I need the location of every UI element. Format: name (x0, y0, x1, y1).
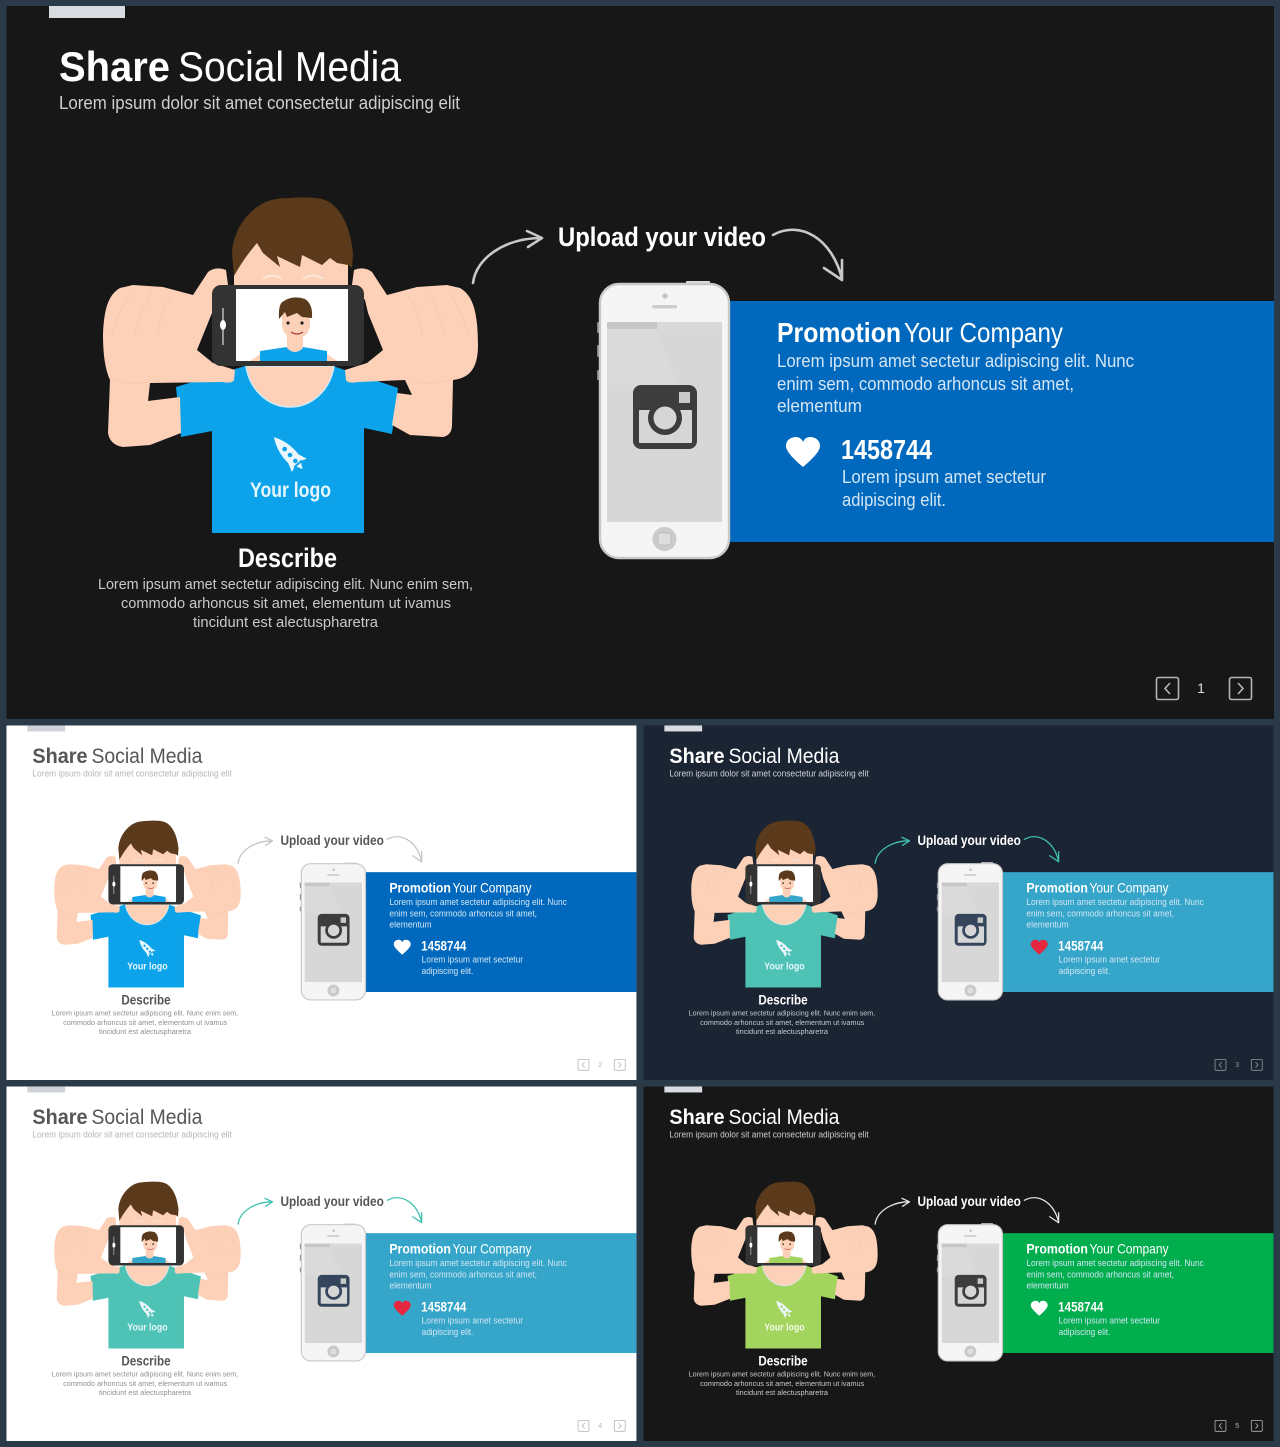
icon: heart (394, 1301, 411, 1316)
icon: heart (786, 437, 820, 467)
promotion heading (389, 1241, 532, 1257)
pagination (1215, 1059, 1262, 1070)
like text: Lorem ipsum amet sectetur (422, 1316, 523, 1326)
illustration: person holding phone (103, 197, 478, 533)
icon: heart (394, 940, 411, 955)
icon: smartphone with instagram (937, 862, 1002, 1000)
slide 2: white blue slide (6, 725, 636, 1080)
title: Share (32, 745, 88, 768)
title: Social Media (729, 1106, 840, 1129)
icon: heart (1031, 1301, 1048, 1316)
promotion heading: Your Company (904, 317, 1063, 348)
title: Social Media (92, 1106, 203, 1129)
promotion text: elementum (389, 919, 432, 929)
title (32, 1106, 203, 1129)
describe text (98, 576, 473, 631)
upload heading: Upload your video (280, 833, 384, 848)
describe text: tincidunt est alectuspharetra (736, 1388, 829, 1397)
subtitle: Lorem ipsum dolor sit amet consectetur adipiscing elit (59, 93, 460, 113)
like text: adipiscing elit. (1059, 966, 1110, 976)
like text: adipiscing elit. (422, 966, 473, 976)
title: Share (59, 43, 170, 90)
title (669, 1106, 840, 1129)
title: Share (32, 1106, 88, 1129)
promotion text (1026, 897, 1204, 929)
pagination: 2 (598, 1062, 602, 1069)
like text: adipiscing elit. (1059, 1327, 1110, 1337)
like text: Lorem ipsum amet sectetur (1059, 1316, 1160, 1326)
promotion heading (777, 317, 1063, 348)
promotion text (389, 1258, 567, 1290)
arrows (875, 1198, 1059, 1224)
promotion text: enim sem, commodo arhoncus sit amet, (777, 374, 1074, 394)
promotion text: Lorem ipsum amet sectetur adipiscing elit. Nunc (389, 1258, 567, 1268)
promotion heading: Your Company (1089, 1241, 1169, 1257)
describe text (52, 1008, 238, 1036)
illustration: person holding phone (691, 821, 878, 988)
like count: 1458744 (1058, 1299, 1104, 1315)
title: Social Media (92, 745, 203, 768)
promotion heading: Promotion (1026, 1241, 1088, 1257)
like text: adipiscing elit. (842, 490, 946, 510)
pagination: 5 (1235, 1423, 1239, 1430)
promotion heading: Promotion (1026, 880, 1088, 896)
promotion heading: Your Company (452, 880, 532, 896)
title (669, 745, 840, 768)
promotion heading (389, 880, 532, 896)
illustration: person holding phone: Your logo (127, 1323, 168, 1334)
promotion text: enim sem, commodo arhoncus sit amet, (389, 1269, 537, 1279)
pagination (578, 1420, 625, 1431)
like count: 1458744 (841, 434, 932, 465)
illustration: person holding phone: Your logo (764, 962, 805, 973)
subtitle: Lorem ipsum dolor sit amet consectetur adipiscing elit (32, 769, 232, 779)
describe text: Lorem ipsum amet sectetur adipiscing elit. Nunc enim sem, (52, 1008, 238, 1017)
like count: 1458744 (421, 1299, 467, 1315)
illustration: person holding phone: Your logo (127, 962, 168, 973)
like text (422, 1316, 523, 1337)
promotion text: enim sem, commodo arhoncus sit amet, (1026, 908, 1174, 918)
arrows (238, 1198, 422, 1224)
promotion heading (1026, 1241, 1169, 1257)
describe heading: Describe (758, 992, 808, 1007)
title: Share (669, 1106, 725, 1129)
describe heading: Describe (758, 1353, 808, 1368)
promotion heading: Promotion (777, 317, 901, 348)
describe text: commodo arhoncus sit amet, elementum ut ivamus (121, 595, 451, 612)
promotion heading: Your Company (1089, 880, 1169, 896)
upload heading: Upload your video (558, 222, 766, 252)
upload heading: Upload your video (280, 1194, 384, 1209)
like text (842, 467, 1046, 510)
illustration: person holding phone (691, 1182, 878, 1349)
describe text: commodo arhoncus sit amet, elementum ut ivamus (700, 1018, 865, 1027)
arrows (875, 837, 1059, 863)
slide 1: large dark slide (6, 6, 1274, 719)
describe text (689, 1008, 875, 1036)
upload heading: Upload your video (917, 833, 1021, 848)
like text (422, 955, 523, 976)
describe text: tincidunt est alectuspharetra (99, 1027, 192, 1036)
arrows (473, 230, 842, 283)
promotion text: Lorem ipsum amet sectetur adipiscing elit. Nunc (1026, 897, 1204, 907)
pagination: 3 (1235, 1062, 1239, 1069)
icon: smartphone with instagram (300, 1223, 365, 1361)
subtitle: Lorem ipsum dolor sit amet consectetur adipiscing elit (32, 1130, 232, 1140)
promotion text: enim sem, commodo arhoncus sit amet, (389, 908, 537, 918)
promotion band (366, 872, 636, 992)
slide 3: navy teal slide (643, 725, 1273, 1080)
promotion band (366, 1233, 636, 1353)
describe text: tincidunt est alectuspharetra (99, 1388, 192, 1397)
describe text: Lorem ipsum amet sectetur adipiscing elit. Nunc enim sem, (689, 1369, 875, 1378)
like count: 1458744 (421, 938, 467, 954)
icon: smartphone with instagram (300, 862, 365, 1000)
title (32, 745, 203, 768)
like count: 1458744 (1058, 938, 1104, 954)
slide 4: white teal slide (6, 1086, 636, 1441)
describe heading: Describe (121, 992, 171, 1007)
promotion text (777, 351, 1134, 416)
illustration: person holding phone: Your logo (250, 479, 331, 502)
like text: Lorem ipsum amet sectetur (1059, 955, 1160, 965)
promotion text: elementum (1026, 1280, 1069, 1290)
promotion heading: Promotion (389, 1241, 451, 1257)
illustration: person holding phone (54, 1182, 241, 1349)
promotion band (1003, 872, 1273, 992)
like text (1059, 955, 1160, 976)
icon: heart (1031, 940, 1048, 955)
subtitle: Lorem ipsum dolor sit amet consectetur adipiscing elit (669, 1130, 869, 1140)
promotion text: Lorem ipsum amet sectetur adipiscing elit. Nunc (1026, 1258, 1204, 1268)
promotion heading: Promotion (389, 880, 451, 896)
title: Share (669, 745, 725, 768)
promotion band (1003, 1233, 1273, 1353)
upload heading: Upload your video (917, 1194, 1021, 1209)
describe heading: Describe (238, 543, 337, 573)
describe text: commodo arhoncus sit amet, elementum ut ivamus (63, 1379, 228, 1388)
pagination: 4 (598, 1423, 602, 1430)
describe text: commodo arhoncus sit amet, elementum ut ivamus (700, 1379, 865, 1388)
title (59, 43, 402, 90)
slide 5: dark green slide (643, 1086, 1273, 1441)
illustration: person holding phone: Your logo (764, 1323, 805, 1334)
like text: Lorem ipsum amet sectetur (842, 467, 1046, 487)
promotion heading (1026, 880, 1169, 896)
pagination (1215, 1420, 1262, 1431)
illustration: person holding phone (54, 821, 241, 988)
promotion text: Lorem ipsum amet sectetur adipiscing elit. Nunc (777, 351, 1134, 371)
promotion text (1026, 1258, 1204, 1290)
pagination: 1 (1197, 680, 1205, 696)
icon: smartphone with instagram (597, 281, 729, 558)
arrows (238, 837, 422, 863)
subtitle: Lorem ipsum dolor sit amet consectetur adipiscing elit (669, 769, 869, 779)
pagination (1156, 678, 1252, 700)
describe text (52, 1369, 238, 1397)
describe text: Lorem ipsum amet sectetur adipiscing elit. Nunc enim sem, (98, 576, 473, 593)
title: Social Media (178, 43, 402, 90)
describe text: Lorem ipsum amet sectetur adipiscing elit. Nunc enim sem, (689, 1008, 875, 1017)
icon: smartphone with instagram (937, 1223, 1002, 1361)
describe text: commodo arhoncus sit amet, elementum ut ivamus (63, 1018, 228, 1027)
promotion text (389, 897, 567, 929)
promotion heading: Your Company (452, 1241, 532, 1257)
like text: adipiscing elit. (422, 1327, 473, 1337)
promotion text: elementum (389, 1280, 432, 1290)
promotion band (730, 301, 1274, 542)
describe text: Lorem ipsum amet sectetur adipiscing elit. Nunc enim sem, (52, 1369, 238, 1378)
promotion text: elementum (777, 396, 862, 416)
describe text (689, 1369, 875, 1397)
describe heading: Describe (121, 1353, 171, 1368)
describe text: tincidunt est alectuspharetra (736, 1027, 829, 1036)
like text: Lorem ipsum amet sectetur (422, 955, 523, 965)
promotion text: enim sem, commodo arhoncus sit amet, (1026, 1269, 1174, 1279)
promotion text: elementum (1026, 919, 1069, 929)
promotion text: Lorem ipsum amet sectetur adipiscing elit. Nunc (389, 897, 567, 907)
pagination (578, 1059, 625, 1070)
like text (1059, 1316, 1160, 1337)
title: Social Media (729, 745, 840, 768)
describe text: tincidunt est alectuspharetra (193, 614, 379, 631)
